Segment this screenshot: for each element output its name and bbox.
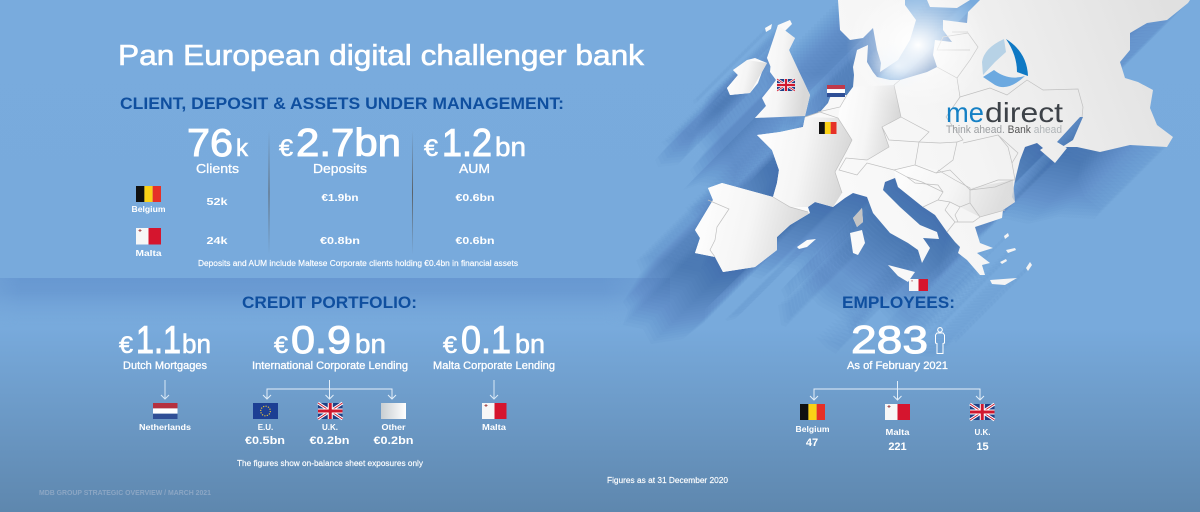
logo mark [982,39,1028,87]
stat: Malta corporate lending: 0.1 [461,319,511,362]
EU: €0.5bn [245,435,285,447]
row: Belgium: €1.9bn [322,193,358,204]
UK [970,404,994,453]
stat: 283: 283 [851,319,928,362]
logo wordmark: me [946,97,984,128]
date label: As of February 2021 [847,360,948,372]
stat: AUM: AUM [459,161,490,176]
map flag: UK [777,79,795,91]
row: Malta [136,228,494,258]
UK: U.K. [974,428,990,437]
arrow tree [810,381,984,400]
Belgium [796,404,830,449]
logo tagline: Think ahead. Bank ahead [946,124,1062,136]
Netherlands [139,403,192,432]
Malta: Malta [482,423,507,432]
heading: EMPLOYEES: [842,293,955,312]
stat: international corporate lending: € [274,332,289,359]
sun glare over the Baltic [846,0,990,109]
stat: AUM: € [424,135,439,162]
arrow: to Malta [490,380,498,399]
row: Malta: Malta [136,249,162,258]
footnote: Deposits and AUM include Maltese Corporate clients holding €0.4bn in financial assets [198,259,518,268]
icon: person [936,328,944,354]
stat: international corporate lending: bn [355,329,386,359]
stat: international corporate lending [252,319,408,372]
stat: AUM [424,122,526,176]
stat: international corporate lending: 0.9 [291,319,351,362]
arrow tree: international lending [263,380,396,399]
row: Malta: €0.8bn [320,236,360,247]
stat: Dutch mortgages: € [119,332,134,359]
heading: CLIENT, DEPOSIT & ASSETS UNDER MANAGEMENT: [120,94,564,113]
panel: client, deposit and AUM [120,94,564,268]
map flag: Malta [909,279,928,291]
Belgium: 47 [806,437,818,449]
Other: €0.2bn [374,435,414,447]
country shading [695,183,810,272]
UK: 15 [976,441,989,453]
stat: clients: Clients [196,161,240,176]
Other [374,403,414,447]
row: Belgium: €0.6bn [456,193,494,204]
stat: deposits: 2.7bn [296,122,401,165]
map flag: Netherlands [827,85,845,97]
EU [245,403,285,447]
Belgium: Belgium [796,425,830,434]
arrow: to Netherlands [161,380,169,399]
Netherlands: Netherlands [139,423,192,432]
row: Belgium: 52k [206,197,228,208]
stat: deposits: € [279,135,294,162]
footnote: The figures show on-balance sheet exposures only [237,459,423,468]
panel: employees [796,293,994,453]
row: Belgium [132,186,494,214]
panel: credit portfolio [119,293,555,468]
row: Malta: 24k [206,236,228,247]
stat: Malta corporate lending [433,319,555,372]
stat: clients: k [236,135,249,162]
row: Belgium: Belgium [132,205,166,214]
stat: Dutch mortgages: bn [182,329,211,359]
Malta [482,403,507,432]
footer: MDB GROUP STRATEGIC OVERVIEW / MARCH 2021 [39,490,211,497]
stat: AUM: bn [495,132,526,162]
map flag: Belgium [819,122,836,134]
UK [310,403,350,447]
title: Pan European digital challenger bank [118,40,645,72]
UK: €0.2bn [310,435,350,447]
Malta [885,404,910,453]
stat: clients: 76 [187,122,233,165]
map of Europe [623,0,1190,357]
stat: deposits [279,122,401,176]
stat: Dutch mortgages: 1.1 [136,319,181,362]
stat: international corporate lending: International Corporate Lending [252,360,408,372]
stat: AUM: 1.2 [442,122,492,165]
stat: Malta corporate lending: € [443,332,458,359]
UK: U.K. [322,423,338,432]
stat: Dutch mortgages: Dutch Mortgages [123,360,207,372]
stat: clients [187,122,249,176]
Malta: Malta [886,428,910,437]
stat: Malta corporate lending: bn [515,329,545,359]
Other: Other [382,423,406,432]
EU: E.U. [258,423,273,432]
stat: Dutch mortgages [119,319,211,372]
MeDirect logo [946,39,1063,136]
stat: deposits: Deposits [313,161,368,176]
row: Malta: €0.6bn [456,236,494,247]
heading: CREDIT PORTFOLIO: [242,293,417,312]
band across the credit section [0,278,645,304]
Malta: 221 [888,441,907,453]
stat: Malta corporate lending: Malta Corporate Lending [433,360,555,372]
as-at date: Figures as at 31 December 2020 [607,476,729,485]
MeDirect logo: direct [985,97,1063,128]
